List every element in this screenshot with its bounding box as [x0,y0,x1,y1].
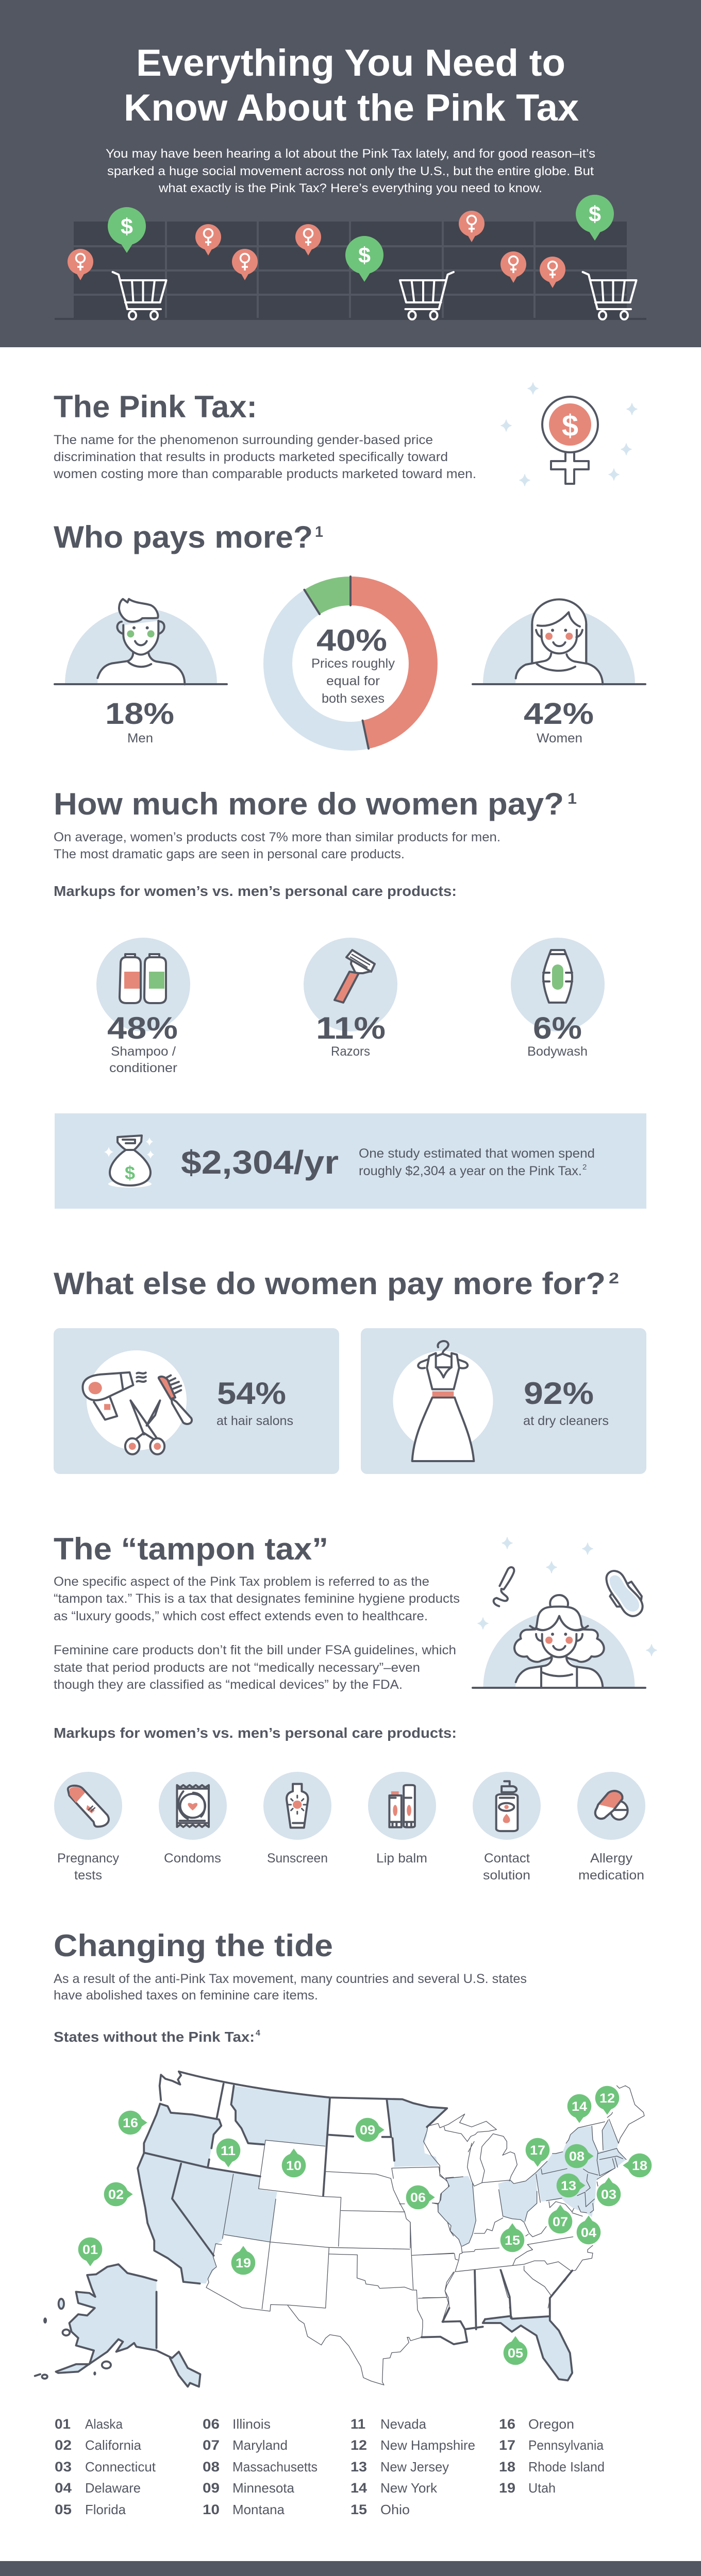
legend: state list: 12 [350,2437,367,2453]
labels: Contact [484,1851,530,1866]
map pins: 17 [530,2143,545,2158]
panel: who pays more [54,520,646,749]
stat: razors [316,1011,386,1059]
title [124,42,579,129]
card: hair salons: at hair salons [216,1414,293,1428]
icon: pregnancy test [68,1786,109,1827]
map pins: 07 [553,2215,568,2229]
heading: What else do women pay more for? [54,1266,606,1301]
labels: Lip balm [376,1851,427,1866]
icon: female symbol pins [68,211,565,288]
title: Everything You Need to [136,42,565,84]
stat: women [524,697,594,745]
icon: allergy pills [595,1791,628,1820]
icon: razor [304,938,397,1031]
body text: One specific aspect of the Pink Tax problem is referred to as the [54,1574,429,1589]
legend: state list: 03 [55,2459,72,2475]
body text [54,1972,527,2003]
icon: shopping cart middle [400,272,454,319]
stat: bodywash: Bodywash [527,1044,588,1059]
legend: state list: Delaware [85,2480,141,2496]
map pins: 01 [82,2243,98,2257]
icon: money bag [104,1136,154,1188]
icon: condom [177,1785,209,1827]
heading: The Pink Tax: [54,389,257,424]
body text: The most dramatic gaps are seen in personal care products. [54,847,405,861]
body text: As a result of the anti-Pink Tax movement, many countries and several U.S. states [54,1972,527,1986]
panel: the tampon tax [54,1532,657,1883]
panel: the pink tax definition [53,383,637,486]
donut chart: equal for [326,674,380,688]
map pins: 13 [561,2179,576,2193]
map pins: 18 [632,2159,647,2173]
legend: state list: Nevada [380,2416,427,2432]
card: hair salons: 54% [217,1376,286,1411]
legend: state list: 01 [55,2416,71,2432]
legend: state list: Connecticut [85,2459,156,2475]
legend: state list: Rhode Island [528,2459,605,2475]
icon: shampoo and conditioner [96,938,190,1031]
icon: female symbol with dollar: $ [562,409,578,443]
heading: 1 [568,790,577,807]
definition text: discrimination that results in products marketed specifically toward [54,450,448,464]
illustration: man [54,599,228,685]
map pins: 06 [410,2191,426,2205]
labels: solution [483,1868,530,1883]
intro text [106,147,595,195]
subheading: 4 [256,2029,260,2038]
icon: dress on hanger [412,1341,474,1461]
icon: sunscreen [287,1784,308,1827]
icon: bodywash [511,938,605,1031]
legend: state list: 06 [203,2416,220,2432]
map pins: 03 [601,2188,616,2202]
legend: state list: 19 [499,2480,515,2496]
legend: state list: Massachusetts [232,2459,318,2475]
donut chart: both sexes [322,691,385,706]
stat: razors: Razors [331,1044,370,1059]
legend: state list: New Jersey [380,2459,449,2475]
legend: state list: Oregon [528,2416,574,2432]
legend: state list [55,2416,605,2517]
callout: yearly cost: One study estimated that women spend [359,1146,595,1161]
icon: female symbol with dollar [501,383,637,486]
donut chart: 40% [316,623,387,657]
map pins: 08 [569,2149,585,2164]
labels: Sunscreen [267,1851,328,1866]
body text: “tampon tax.” This is a tax that designates feminine hygiene products [54,1591,460,1606]
illustration: woman [472,599,646,685]
icon: dollar pins [108,195,614,282]
legend: state list: 16 [499,2416,515,2432]
card: dry cleaners: 92% [524,1376,594,1411]
icon: dollar pins: $ [121,214,133,239]
stat: men: 18% [105,697,174,731]
heading: The “tampon tax” [54,1532,328,1566]
legend: state list: 04 [55,2480,72,2496]
icon: lip balm [389,1785,415,1827]
panel: how much more do women pay [54,787,646,1209]
panel: hero header [0,0,701,347]
labels: Condoms [164,1851,221,1866]
legend: state list: Ohio [380,2502,410,2517]
legend: state list: 17 [499,2437,515,2453]
map pins: 19 [236,2256,251,2270]
card: dry cleaners: at dry cleaners [523,1414,609,1428]
donut chart: Prices roughly [311,656,395,671]
map pins: 02 [108,2188,124,2202]
subheading: Markups for women’s vs. men’s personal care products: [54,883,457,899]
heading: 1 [315,523,323,540]
map pins: 04 [581,2226,596,2240]
subheading: States without the Pink Tax: [54,2029,255,2045]
callout: yearly cost: 2 [582,1163,587,1172]
map pins: 10 [286,2159,302,2173]
donut chart [278,577,423,749]
legend: state list: Maryland [232,2437,288,2453]
subheading: Markups for women’s vs. men’s personal care products: [54,1725,457,1741]
stat: women: 42% [524,697,594,731]
heading: Changing the tide [54,1928,333,1963]
definition text: The name for the phenomenon surrounding gender-based price [54,433,433,447]
labels: medication [578,1868,644,1883]
map pins: 09 [360,2123,375,2138]
map pins: 15 [505,2233,520,2248]
illustration: woman with tampon and pad [472,1537,657,1689]
intro text: You may have been hearing a lot about the Pink Tax lately, and for good reason–it’s [106,147,595,161]
intro text: sparked a huge social movement across not only the U.S., but the entire globe. But [107,164,594,178]
callout: yearly cost: roughly $2,304 a year on the Pink Tax. [359,1164,582,1178]
map pins [78,2086,652,2365]
legend: state list: 14 [350,2480,367,2496]
stat: shampoo: Shampoo / [111,1044,176,1059]
callout: yearly cost: $2,304/yr [181,1144,339,1181]
stat: women: Women [537,731,582,745]
legend: state list: Utah [528,2480,556,2496]
legend: state list: Illinois [232,2416,271,2432]
stat: shampoo: 48% [107,1011,178,1045]
heading: How much more do women pay? [54,787,564,821]
body text: state that period products are not “medically necessary”–even [54,1660,420,1675]
title: Know About the Pink Tax [124,87,579,129]
map pins: 14 [572,2099,587,2114]
map pins: 12 [599,2091,615,2106]
legend: state list: 11 [350,2416,365,2432]
body text [54,830,500,861]
icon row: personal care products [54,1772,645,1883]
stat: men: Men [127,731,153,745]
icon: money bag: $ [125,1162,135,1183]
callout: yearly cost [55,1113,646,1209]
map pins: 11 [221,2144,236,2158]
legend: state list: 18 [499,2459,515,2475]
map pins: 16 [123,2116,138,2130]
legend: state list: 09 [203,2480,220,2496]
stat: razors: 11% [316,1011,386,1045]
labels [57,1851,644,1883]
body text: as “luxury goods,” which cost effect extends even to healthcare. [54,1609,428,1623]
body text: Feminine care products don’t fit the bill under FSA guidelines, which [54,1643,456,1657]
card: dry cleaners [361,1328,646,1474]
legend: state list: 08 [203,2459,220,2475]
stat: bodywash [527,1011,588,1059]
labels: Allergy [590,1851,633,1866]
definition text [53,433,476,481]
labels: Pregnancy [57,1851,119,1866]
heading: Who pays more? [54,520,313,554]
legend: state list: Montana [232,2502,285,2517]
labels: tests [74,1868,102,1883]
icon: dollar pins: $ [358,243,371,268]
stat: men [105,697,174,745]
legend: state list: Minnesota [232,2480,295,2496]
body text: though they are classified as “medical devices” by the FDA. [54,1677,403,1692]
legend: state list: California [85,2437,142,2453]
legend: state list: Florida [85,2502,126,2517]
map: states without the pink tax [35,2072,652,2387]
intro text: what exactly is the Pink Tax? Here’s everything you need to know. [158,181,542,195]
heading: 2 [609,1270,619,1287]
icon: dollar pins: $ [589,202,601,227]
store shelves [55,222,646,320]
map pins: 05 [508,2346,523,2361]
legend: state list: Alaska [85,2416,123,2432]
icon: contact solution [496,1781,518,1831]
body text: On average, women’s products cost 7% more than similar products for men. [54,830,500,844]
stat: shampoo [107,1011,178,1075]
icon: shopping cart left [112,272,166,319]
panel: call to action [0,2561,701,2576]
legend: state list: New York [380,2480,438,2496]
panel: changing the tide [35,1928,652,2517]
legend: state list: 02 [55,2437,72,2453]
legend: state list: New Hampshire [380,2437,475,2453]
icon: hair tools [82,1372,192,1454]
body text [54,1574,460,1692]
definition text: women costing more than comparable products marketed toward men. [53,467,476,481]
stat: bodywash: 6% [533,1011,582,1045]
icon: shopping cart right [582,272,637,319]
legend: state list: 10 [203,2502,220,2517]
legend: state list: 15 [350,2502,367,2517]
card: hair salons [54,1328,339,1474]
legend: state list: 13 [350,2459,367,2475]
panel: what else do women pay more for [54,1266,646,1474]
body text: have abolished taxes on feminine care items. [54,1988,318,2003]
legend: state list: Pennsylvania [528,2437,604,2453]
legend: state list: 05 [55,2502,72,2517]
legend: state list: 07 [203,2437,220,2453]
stat: shampoo: conditioner [109,1061,177,1075]
